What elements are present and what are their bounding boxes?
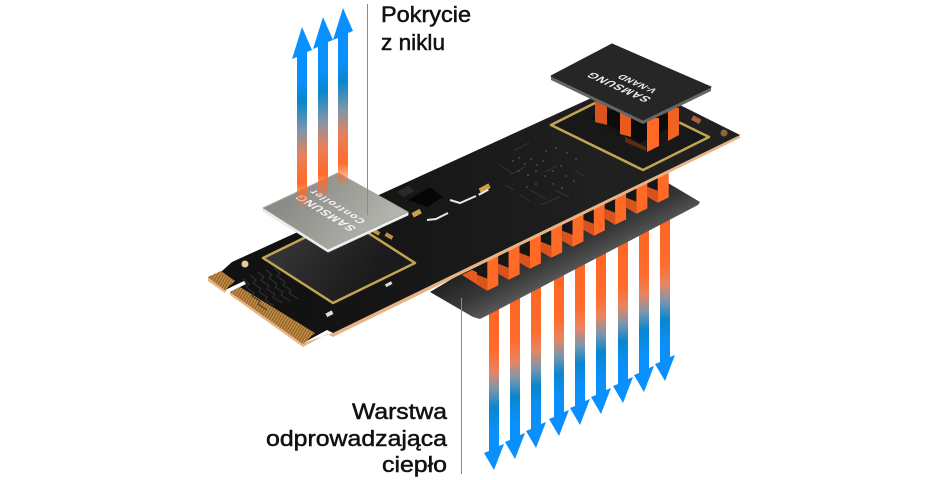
nickel-coated controller lid bbox=[263, 173, 408, 252]
V-NAND chip lid bbox=[551, 44, 711, 124]
V-NAND chip markings: V-NAND bbox=[615, 72, 661, 94]
controller chip markings: SAMSUNG bbox=[291, 193, 360, 233]
label: nickel coating: z niklu bbox=[381, 30, 445, 55]
label: heat spreading layer: Warstwa bbox=[352, 399, 448, 424]
V-NAND chip markings: SAMSUNG bbox=[582, 70, 655, 104]
label: nickel coating: Pokrycie bbox=[381, 2, 471, 27]
board traces and pads bbox=[243, 143, 585, 310]
controller chip base with gold frame bbox=[263, 218, 415, 303]
V-NAND orange heat fins bbox=[590, 100, 680, 152]
small components bbox=[325, 115, 701, 317]
label: heat spreading layer: odprowadzająca bbox=[266, 426, 448, 451]
gold edge connector bbox=[208, 271, 315, 344]
heat spreader plate bbox=[430, 170, 700, 319]
arrows: heat flowing up bbox=[292, 8, 353, 205]
orange thermal fins bbox=[462, 163, 669, 291]
SSD circuit board bbox=[208, 81, 740, 347]
V-NAND base with gold frame bbox=[551, 92, 709, 170]
arrows: heat flowing down bbox=[484, 214, 675, 470]
mounting holes bbox=[242, 260, 248, 268]
leader line: heat spreading layer bbox=[460, 298, 462, 474]
controller chip markings: Controller bbox=[306, 188, 369, 225]
label: heat spreading layer: ciepło bbox=[382, 452, 447, 477]
leader line: nickel coating bbox=[366, 4, 368, 215]
